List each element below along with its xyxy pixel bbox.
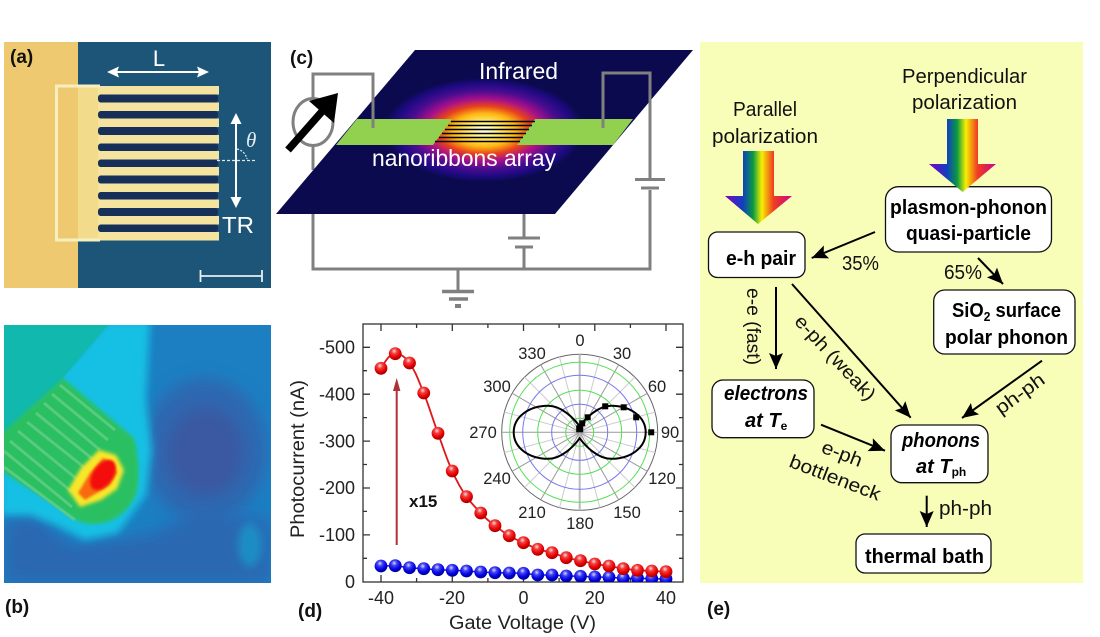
y axis tick labels: 0 [345, 572, 355, 592]
heading: parallel polarization [712, 99, 818, 148]
arrow: e-h to electrons [775, 287, 777, 369]
box: thermal bath [856, 534, 991, 573]
x axis tick labels: -40 [368, 588, 394, 608]
label b: (b) [5, 597, 29, 618]
box: phonons at Tph: ph [952, 465, 966, 479]
label ph-ph diagonal: ph-ph [991, 369, 1049, 419]
length arrow L [107, 66, 209, 78]
box: plasmon-phonon quasi-particle [886, 187, 1052, 252]
label Infrared: Infrared [479, 58, 558, 84]
y axis tick labels: -100 [319, 525, 355, 545]
box: SiO2 surface polar phonon: 2 [984, 309, 990, 324]
y axis tick labels: -400 [319, 384, 355, 404]
box: phonons at Tph: at T [916, 456, 952, 478]
arrow: perpendicular rainbow [929, 119, 996, 192]
arrow: e-h to phonons [792, 284, 911, 418]
polar data points [576, 403, 654, 435]
polar angle labels: 90 [661, 424, 679, 442]
box: SiO2 surface polar phonon: polar phonon [945, 327, 1068, 349]
wires over plane [373, 73, 650, 128]
box: electrons at Te: at T [745, 410, 781, 432]
label e-ph bottleneck: e-ph [818, 437, 865, 472]
label e: (e) [707, 599, 730, 620]
polar inset [469, 332, 679, 533]
polar angle labels: 330 [518, 345, 546, 363]
label TR: TR [222, 212, 254, 238]
label 35%: 35% [842, 253, 879, 275]
panel b: photocurrent map [0, 320, 271, 583]
label e-ph weak: e-ph (weak) [790, 311, 879, 405]
scale bar [200, 270, 262, 282]
nanoribbon lines [435, 122, 535, 142]
polar lobes [514, 406, 646, 459]
polarization double arrow [230, 113, 242, 208]
heading: parallel polarization: polarization [712, 126, 818, 148]
red data series [375, 347, 672, 578]
box: e-h pair [708, 232, 805, 278]
box: e-h pair: e-h pair [726, 248, 796, 270]
y axis title: Photocurrent (nA) [288, 380, 309, 538]
arrow: plasmon to SiO2 [978, 258, 1003, 284]
x axis tick labels: 20 [585, 588, 605, 608]
label c: (c) [290, 48, 313, 69]
polar angle labels: 180 [566, 515, 594, 533]
arrow: plasmon to e-h pair [812, 232, 875, 258]
label a: (a) [10, 47, 33, 68]
panel a: device micrograph [4, 42, 271, 288]
heading: parallel polarization: Parallel [733, 99, 797, 121]
heading: perpendicular polarization: Perpendicular [902, 66, 1027, 88]
red x15 arrow [393, 378, 400, 545]
polar angle labels: 60 [648, 378, 666, 396]
polar angle labels: 270 [469, 424, 497, 442]
panel e: relaxation pathway diagram [700, 42, 1083, 583]
panel d: photocurrent chart [288, 324, 683, 634]
polar angle labels: 300 [483, 378, 511, 396]
box: electrons at Te: electrons [724, 383, 808, 405]
label d: (d) [298, 601, 322, 622]
arrow: phonons to thermal bath [926, 496, 928, 527]
x axis tick labels [368, 588, 676, 608]
heading: perpendicular polarization [902, 66, 1027, 114]
chart frame and ticks [363, 324, 683, 582]
box: thermal bath: thermal bath [865, 546, 984, 568]
label x15: x15 [409, 492, 437, 511]
label e-e fast: e-e (fast) [742, 288, 763, 365]
contact strip left [336, 119, 452, 145]
arrow: SiO2 to phonons [962, 361, 1042, 418]
box: plasmon-phonon quasi-particle: quasi-particle [906, 223, 1031, 245]
box: SiO2 surface polar phonon: surface [990, 300, 1061, 322]
polar angle labels: 210 [518, 504, 546, 522]
contact strip right [517, 119, 633, 145]
box: electrons at Te: e [781, 419, 788, 433]
y axis tick labels: -200 [319, 478, 355, 498]
x axis tick labels: 0 [518, 588, 529, 608]
y axis tick labels: -500 [319, 338, 355, 358]
angle marker [217, 149, 257, 160]
label nanoribbons array: nanoribbons array [372, 145, 556, 171]
box: SiO2 surface polar phonon [934, 290, 1075, 354]
ammeter [288, 93, 338, 150]
box: phonons at Tph: phonons [901, 430, 980, 452]
polar angle labels: 150 [613, 504, 641, 522]
polar angle labels: 0 [575, 332, 585, 350]
polar angle labels: 30 [613, 345, 631, 363]
box: SiO2 surface polar phonon: SiO [952, 300, 986, 322]
label L: L [153, 46, 165, 71]
label e-ph bottleneck [786, 437, 884, 506]
arrow: electrons to phonons [821, 425, 885, 451]
polar angle labels: 240 [483, 470, 511, 488]
heading: perpendicular polarization: polarization [912, 92, 1017, 114]
panel c: circuit wires [313, 73, 665, 306]
x axis title: Gate Voltage (V) [449, 613, 596, 634]
box: phonons at Tph [891, 425, 988, 483]
label ph-ph vertical: ph-ph [939, 498, 992, 520]
label 65%: 65% [944, 262, 982, 284]
x axis tick labels: 40 [656, 588, 676, 608]
polar angle labels [469, 332, 679, 533]
polar angle labels: 120 [648, 470, 676, 488]
blue data series [374, 559, 672, 582]
x axis tick labels: -20 [439, 588, 465, 608]
label theta: θ [246, 128, 256, 152]
y axis tick labels [319, 338, 355, 592]
y axis tick labels: -300 [319, 432, 355, 452]
arrow: parallel rainbow [725, 151, 792, 224]
box: electrons at Te [712, 380, 814, 438]
label e-ph bottleneck: bottleneck [786, 451, 884, 506]
box: plasmon-phonon quasi-particle: plasmon-phonon [890, 197, 1047, 219]
panel c: infrared plane [276, 50, 693, 214]
